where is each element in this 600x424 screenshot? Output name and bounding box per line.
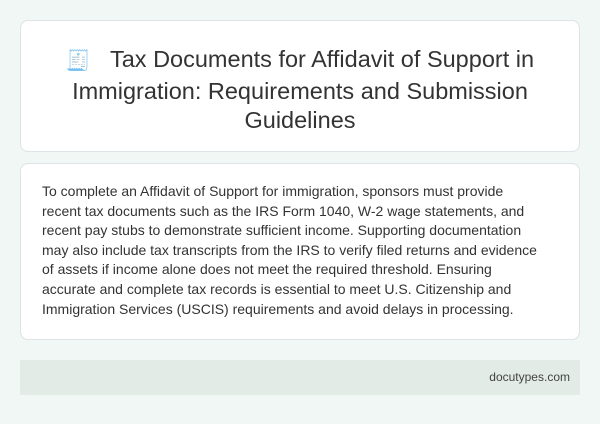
- title: 🧾 Tax Documents for Affidavit of Support in Immigration: Requirements and Submission Guidelines: [66, 46, 534, 133]
- panel: title card: [20, 20, 580, 152]
- text block: To complete an Affidavit of Support for immigration, sponsors must provide recent tax documents such as the IRS Form 1040, W-2 wage statements, and recent pay stubs to demonstrate sufficient income. Supporting documentation may also include tax transcripts from the IRS to verify filed returns and evidence of assets if income alone does not meet the required threshold. Ensuring accurate and complete tax records is essential to meet U.S. Citizenship and Immigration Services (USCIS) requirements and avoid delays in processing.: [42, 183, 537, 317]
- footer text: docutypes.com: [489, 370, 570, 384]
- panel: description: [20, 163, 580, 340]
- footer: [20, 360, 580, 395]
